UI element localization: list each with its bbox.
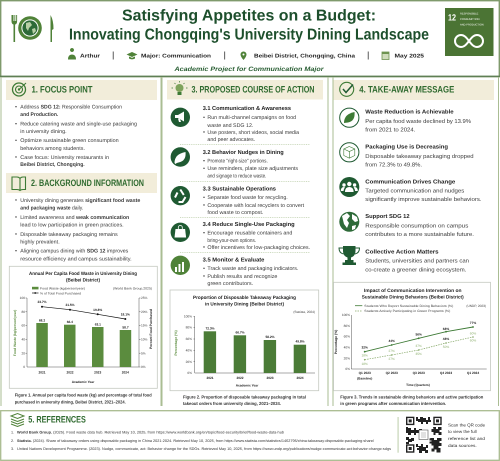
series: green programmes: 60% [470,332,476,336]
line chart: communication intervention: Q1 2024 [467,371,479,375]
action 3.2: Use reminders, plate size adjustments [207,166,298,172]
focus point bullets: Optimize sustainable green consumption [20,138,119,144]
background bullets [15,198,140,262]
line chart: communication intervention: Sustainable Dining Behaviors (Beibei District) [362,294,464,300]
author and meta row: Arthur [80,54,101,60]
author and meta row: May 2025 [394,54,424,60]
bar chart: disposable takeaway packaging: 60% [186,337,192,341]
background bullets: and packaging waste daily. [20,206,83,212]
message: collective action: Students, universities and partners can [365,258,469,265]
message: waste reduction [340,108,471,134]
line chart: communication intervention: Q1 2023 [359,371,371,375]
bar chart: disposable takeaway packaging: (Statista, 2024) [293,310,315,314]
heading: take-away message: 4. TAKE-AWAY MESSAGE [359,84,454,94]
bar and line chart: annual per capita food waste: 2021 [38,370,46,374]
author and meta row [68,48,424,60]
bar and line chart: annual per capita food waste: Percent Food Purchased [149,309,153,349]
message: support SDG 12 [339,212,474,238]
series: green programmes: 27% [389,349,395,353]
bar and line chart: annual per capita food waste: 2022 [66,370,74,374]
bar and line chart: annual per capita food waste: 10% [141,338,148,342]
action 3.5: Publish results and recognize [207,274,277,280]
action 3.3: Separate food waste for recycling. [207,195,288,201]
caption: figure 1 [15,392,152,404]
bar and line chart: annual per capita food waste: 0% [141,365,146,369]
focus point bullets [15,104,137,168]
message: collective action [339,246,469,273]
bar chart: disposable takeaway packaging: 0% [187,371,192,375]
QR caption [448,422,486,448]
message: communication: Targeted communication and nudges [365,188,464,195]
line chart: communication intervention: Impact of Communication Intervention on [364,288,462,294]
action 3.3: food waste to compost. [207,210,263,216]
icon: calendar [382,52,389,60]
series: green programmes: 18% [362,354,368,358]
series: green programmes: 35% [416,352,422,356]
bar chart: disposable takeaway packaging: 100% [184,314,192,318]
action 3.4 [171,221,310,251]
message: communication: significantly improve sustainable behaviors. [365,196,482,203]
line chart: communication intervention: (Baseline) [357,376,372,380]
bar chart: disposable takeaway packaging: 66.7% [235,330,245,334]
bar chart: disposable takeaway packaging: 2023 [266,376,274,380]
QR code [406,417,442,453]
line chart: communication intervention: 40% [344,346,350,350]
SDG 12 badge: 12 [448,12,456,22]
focus point bullets: Reduce catering waste and single-use packaging [20,122,137,128]
legend: Students Who Report Sustainable Dining Behaviors (%) [364,304,453,308]
message: packaging: from 72.3% to 49.8%. [365,161,422,168]
title: Satisfying Appetites on a Budget: [122,8,376,24]
legend: Students Actively Participating in Green Programs (%) [364,309,450,313]
bars [36,323,131,367]
line chart: communication intervention: 20% [344,356,350,360]
line chart: communication intervention: 60% [344,335,350,339]
message: support SDG 12: Responsible consumption on campus [365,222,468,229]
background bullets: Limited awareness and weak communication [20,215,129,221]
bar and line chart: annual per capita food waste: 60 [21,324,25,328]
icon: graduation cap [126,52,138,59]
line chart: communication intervention: Q4 2023 [440,371,452,375]
series: self-reported behaviours: 77% [470,321,476,325]
line chart: communication intervention: 80% [344,324,350,328]
legend: (World Bank Group,2025) [113,286,152,290]
reference list: 3. [11,447,14,451]
reference list: 1. [11,430,14,434]
bar chart: disposable takeaway packaging [170,290,319,391]
message: support SDG 12: Support SDG 12 [365,214,410,220]
line chart: communication intervention [334,282,490,391]
caption: figure 3: in green programs after communication intervention. [340,401,446,406]
series: green programmes [362,332,476,366]
caption: figure 1: purchased in university dining, Beibei District, 2021–2024. [15,400,126,404]
heading: background information [6,173,157,193]
header banner [0,1,500,77]
action 3.1: waste and SDG 12. [207,123,253,129]
title [69,8,429,44]
action 3.1: and peer advocates. [207,137,255,143]
bar chart: disposable takeaway packaging: 72.3% [205,326,215,330]
bar and line chart: annual per capita food waste: 2023 [94,370,101,374]
action 3.4: 3.4 Reduce Single-Use Packaging [203,221,295,228]
action 3.1: 3.1 Communication & Awareness [203,105,291,112]
bar chart: disposable takeaway packaging: 80% [186,326,192,330]
series: green programmes: 60% [470,338,476,342]
bar and line chart: annual per capita food waste: 20 [21,351,25,355]
bar and line chart: annual per capita food waste: 68.2 [39,318,45,322]
background bullets: lead to low participation in green practices. [20,222,124,228]
action 3.5 [171,256,298,287]
bar chart: disposable takeaway packaging: 2022 [236,376,244,380]
legend [355,304,486,313]
action 3.1: Use posters, short videos, social media [207,130,299,136]
action 3.4: Encourage reusable containers and [207,230,292,236]
action 3.3: 3.3 Sustainable Operations [203,185,276,192]
bar and line chart: annual per capita food waste: 0 [23,365,25,369]
bar and line chart: annual per capita food waste: Annual Per Capita Food Waste in University Dining [29,271,137,277]
QR caption: Scan the QR code [448,422,486,428]
caption: figure 3: Figure 3. Trends in sustainable dining behaviors and active participation [340,394,484,400]
bar and line chart: annual per capita food waste: 15% [141,324,148,328]
message: waste reduction: Waste Reduction is Achievable [365,108,454,116]
SDG 12 badge: CONSUMPTION [460,18,480,21]
heading: focus point: 1. FOCUS POINT [32,84,93,95]
line chart: communication intervention: Time (Quarters) [406,383,430,387]
QR caption: data sources. [448,443,477,448]
message: collective action: Collective Action Matters [365,248,439,255]
message: waste reduction: from 2021 to 2024. [365,127,416,134]
heading: proposed course of action: 3. PROPOSED COURSE OF ACTION [192,84,315,94]
bar and line chart: annual per capita food waste: 5% [141,351,146,355]
message: communication [339,177,482,203]
message: support SDG 12: contributes to a more sustainable future. [365,231,474,238]
message: waste reduction: Per capita food waste declined by 13.9% [365,118,471,125]
background bullets: Disposable takeaway packaging remains [20,232,118,238]
panel: take-away message [333,77,498,406]
bar and line chart: annual per capita food waste: 2024 [122,370,129,374]
legend [32,286,152,295]
QR caption: reference list and [448,436,486,441]
SDG 12 badge [445,8,494,56]
series: self-reported behaviours: 44% [389,339,395,343]
message: collective action: co-create a greener dining ecosystem. [365,266,467,273]
line chart: communication intervention: Percentage (%) [334,330,338,354]
legend: Food Waste (kg/person/year) [40,286,85,290]
series: green programmes: 37% [416,344,422,348]
SDG 12 badge: RESPONSIBLE [460,12,479,16]
bar and line chart: annual per capita food waste: Food Waste (kg/person/year) [13,310,17,356]
action 3.2 [171,147,298,180]
action 3.4: Offer incentives for low-packaging choices. [207,245,310,251]
action 3.1 [171,105,299,143]
panel: background information [6,173,157,404]
bar chart: disposable takeaway packaging: Percentage (%) [174,330,178,356]
action 3.5: Track waste and packaging indicators. [207,266,298,272]
reference list [11,430,391,451]
author and meta row: Major: Communication [141,54,211,60]
action 3.4: bring-your-own options. [207,238,256,244]
SDG 12 badge: AND PRODUCTION [460,24,484,26]
series: self-reported behaviours: 32% [362,346,368,350]
action 3.2: 3.2 Behavior Nudges in Dining [203,149,284,156]
icon: plate with globe, fork and knife [12,15,54,42]
bar and line chart: annual per capita food waste: 100 [20,296,25,300]
heading: background information: 2. BACKGROUND INFORMATION [31,177,144,188]
heading: focus point [6,80,157,100]
author and meta row: Beibei District, Chongqing, China [254,54,356,60]
action 3.2: and signage to reduce waste. [207,174,266,180]
bar and line chart: annual per capita food waste: Academic Year [72,380,95,384]
panel: references [1,411,499,460]
action 3.5: 3.5 Monitor & Evaluate [203,256,264,263]
bar chart: disposable takeaway packaging: 58.2% [265,335,275,339]
focus point bullets: in university dining. [20,129,67,135]
bar and line chart: annual per capita food waste: 25% [141,296,148,300]
caption: figure 2: takeout orders from university dining, 2021–2024. [183,401,281,406]
caption: figure 1: Figure 1. Annual per capita food waste (kg) and percentage of total food [15,392,152,398]
legend: % of Total Food Purchased [40,291,81,295]
background bullets: resource efficiency and campus sustainability. [20,256,132,262]
caption: figure 2: Figure 2. Proportion of disposable takeaway packaging in total [183,394,306,400]
line chart: communication intervention: 0% [345,367,350,371]
message: packaging [340,143,474,168]
heading: proposed course of action [167,80,323,100]
focus point bullets: Case focus: University restaurants in [20,155,109,161]
focus point bullets: and Production. [20,112,59,118]
background bullets: highly prevalent. [20,240,60,246]
icon: person [68,48,76,60]
action 3.3: Cooperate with local recyclers to convert [207,203,305,209]
bar chart: disposable takeaway packaging: Proportion of Disposable Takeaway Packaging [193,295,296,301]
series: green programmes: 48% [443,337,449,341]
line chart: communication intervention: Q3 2023 [413,371,425,375]
action 3.2: Promote "right-size" portions. [207,158,268,164]
message: packaging: Disposable takeaway packaging dropped [365,153,474,160]
series: self-reported behaviours: 56% [416,332,422,336]
line chart: communication intervention: Q2 2023 [386,371,398,375]
reference list: Statista. (2024). Share of takeaway orders using disposable packaging in China 2021-2024. Retrieved May 10, 2025, from https://www.statista.com/statistics/1462795/china-takeaway-disposable-packaging-share/ [17,439,375,443]
reference list: 2. [11,439,14,443]
bar and line chart: annual per capita food waste: (Beibei District) [66,277,100,283]
focus point bullets: behaviors among students. [20,146,85,152]
bar and line chart: annual per capita food waste [9,266,157,388]
series: self-reported behaviours: 68% [443,327,449,331]
trend line [42,307,125,319]
title: Innovating Chongqing's University Dining Landscape [69,26,429,44]
action 3.3 [171,185,305,216]
caption: figure 2 [183,394,306,406]
bar and line chart: annual per capita food waste: 20% [141,310,148,314]
icon: stack of books [11,414,24,426]
bar and line chart: annual per capita food waste: 19.8% [93,308,102,312]
bar chart: disposable takeaway packaging: 2021 [206,376,214,380]
QR caption: to view the full [448,429,477,434]
axes [26,298,140,367]
action 3.1: Run multi-channel campaigns on food [207,115,296,121]
bar chart: disposable takeaway packaging: 2024 [296,376,304,380]
focus point bullets: Beibei District, Chongqing. [20,162,85,168]
background bullets: Aligning campus dining with SDG 12 improves [20,248,129,254]
bar and line chart: annual per capita food waste: 63.1 [95,322,101,326]
reference list: United Nations Development Programme. (2023). Nudge, communicate, act: Behavior change for the SDGs. Retrieved May 10, 2025, from https://www.undp.org/publications/nudge-communicate-act-behavior-change-sdgs [17,447,391,451]
series: green programmes: 50% [443,345,449,349]
reference list: World Bank Group. (2025). Food waste data hub. Retrieved May 10, 2025, from https://www.worldbank.org/en/topic/food-security/brief/food-waste-data-hub [17,430,284,434]
bar and line chart: annual per capita food waste: 21.5% [65,303,75,307]
focus point bullets: Address SDG 12: Responsible Consumption [20,104,122,110]
icon: map pin [240,52,246,60]
action 3.5: green contributors. [207,281,253,287]
legend: (UNDP, 2023) [466,304,486,308]
bar chart: disposable takeaway packaging: 49.8% [295,340,305,344]
heading: take-away message [334,80,494,100]
bar chart: disposable takeaway packaging: in University Dining (Beibei District) [205,302,284,308]
bar and line chart: annual per capita food waste: 18.1% [121,312,130,316]
background bullets: University dining generates significant food waste [20,198,140,204]
bar and line chart: annual per capita food waste: 23.7% [37,300,47,304]
bar chart: disposable takeaway packaging: Academic Year [236,384,259,388]
subtitle: Academic Project for Communication Major [173,66,324,73]
series: green programmes: 27% [389,357,395,361]
bar and line chart: annual per capita food waste: 58.7 [122,325,129,329]
panel: proposed course of action [162,77,328,406]
bar chart: disposable takeaway packaging: 20% [186,360,192,364]
bar and line chart: annual per capita food waste: 80 [21,310,25,314]
caption: figure 3 [340,394,484,406]
panel: focus point [6,80,157,168]
series: green programmes: 18% [362,362,368,366]
bar and line chart: annual per capita food waste: 66.4 [67,320,73,324]
series: self-reported behaviours [362,321,476,353]
message: packaging: Packaging Use is Decreasing [365,144,449,150]
panel: left column frame [1,77,161,406]
message: communication: Communication Drives Change [365,178,455,186]
bar and line chart: annual per capita food waste: 40 [21,338,25,342]
heading: references: 5. REFERENCES [28,413,86,424]
bar chart: disposable takeaway packaging: 40% [186,348,192,352]
line chart: communication intervention: 100% [342,313,350,317]
